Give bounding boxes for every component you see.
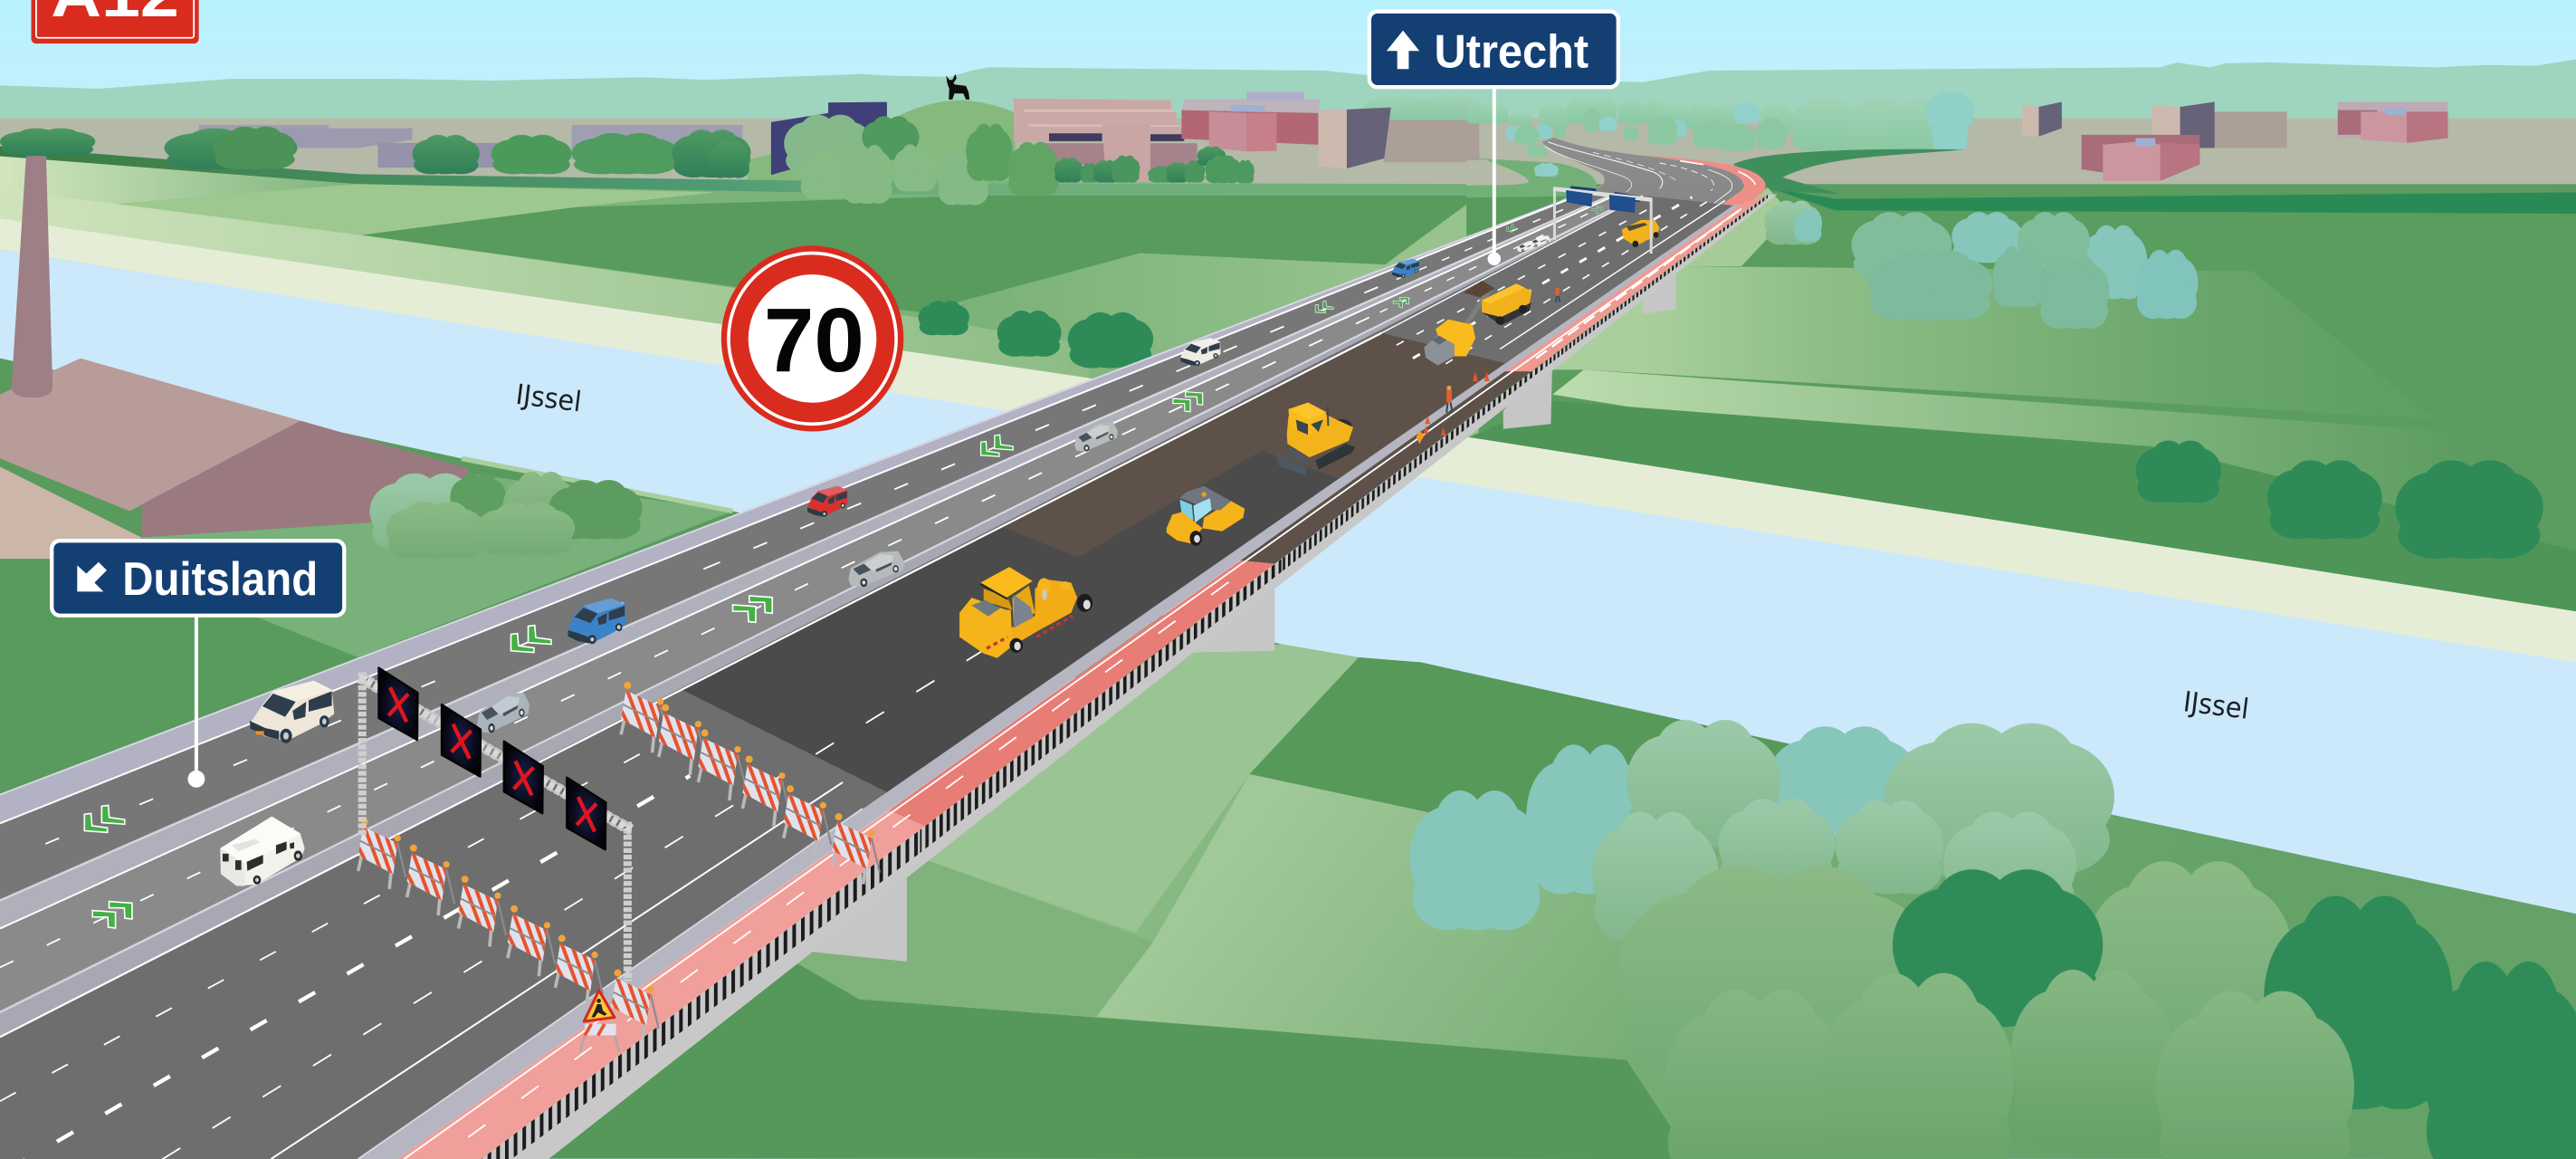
stripped cycle lane bbox=[1240, 371, 1531, 564]
lane closed signal 2 bbox=[442, 704, 481, 777]
distant hills bbox=[0, 59, 2576, 131]
left horizon buildings bbox=[199, 125, 742, 168]
icon: arrow up bbox=[1387, 31, 1419, 69]
white cars farther bbox=[1517, 235, 1550, 252]
workers and cones bbox=[1417, 288, 1560, 444]
large tree cluster foreground bbox=[1409, 720, 2576, 1159]
far road surface bbox=[1466, 138, 1743, 272]
right barrier strip bbox=[358, 204, 1741, 1159]
white van far bbox=[1180, 338, 1221, 366]
far tree line bbox=[1466, 98, 1792, 177]
speed limit sign 70 bbox=[721, 245, 903, 431]
cycle lane upper bbox=[1505, 195, 1768, 371]
closed carriageway bbox=[0, 196, 1733, 1159]
blue car far bbox=[1392, 259, 1419, 278]
barrier by work sign bbox=[606, 970, 659, 1040]
white van bbox=[250, 681, 334, 743]
bridge piers bbox=[794, 263, 1675, 962]
motorway: straight section bbox=[0, 188, 1768, 1159]
cones bbox=[1417, 371, 1490, 444]
bulldozer bbox=[1274, 402, 1355, 475]
icon: arrow down-left bbox=[77, 562, 107, 591]
mid green trees bbox=[1618, 861, 2294, 1081]
dike slope left bbox=[0, 189, 1089, 381]
hill bbox=[748, 101, 1016, 181]
far curved motorway bbox=[1466, 98, 1792, 272]
left horizon trees bbox=[0, 127, 750, 177]
gantry right column bbox=[625, 822, 630, 982]
callout: Utrecht bbox=[1369, 12, 1618, 265]
central horizon trees bbox=[709, 115, 1255, 206]
median strip bbox=[0, 194, 1618, 929]
dark bushes right bbox=[2136, 440, 2543, 559]
right side fields bbox=[1469, 149, 2576, 617]
deer bbox=[946, 74, 969, 100]
callout: Utrecht: Utrecht bbox=[1435, 24, 1589, 77]
fresh asphalt bbox=[682, 450, 1339, 792]
silver car 2 bbox=[848, 551, 904, 587]
red car bbox=[807, 486, 848, 517]
tan built-up ground bbox=[0, 119, 2576, 200]
curb bbox=[1541, 142, 1607, 190]
light field bbox=[115, 184, 716, 235]
left field base bbox=[0, 151, 1479, 493]
river label left: IJssel bbox=[514, 378, 583, 418]
gantry left column bbox=[360, 672, 365, 837]
far dark field bbox=[1466, 196, 1566, 238]
paver machine bbox=[959, 567, 1092, 658]
lower carriageway bbox=[0, 194, 1635, 1011]
pale trees behind buildings bbox=[1363, 95, 1963, 155]
gantry truss bbox=[359, 672, 631, 835]
left barrier strip bbox=[0, 188, 1594, 823]
camper van bbox=[220, 817, 305, 886]
dump truck bbox=[1464, 281, 1531, 325]
worker far bbox=[1556, 288, 1560, 302]
lane closed signal 4 bbox=[567, 778, 606, 849]
upper carriageway bbox=[0, 193, 1610, 899]
dark green trees bbox=[1893, 869, 2576, 1159]
pale green trees upper bbox=[1592, 720, 2114, 942]
second median strip bbox=[0, 196, 1643, 1037]
green horizon band bbox=[0, 147, 1560, 196]
factory bbox=[0, 153, 468, 559]
speed limit sign 70: 70 bbox=[764, 291, 864, 391]
worker bbox=[1446, 386, 1453, 413]
far overhead gantry with blue signs bbox=[1553, 186, 1653, 254]
callout: Duitsland: Duitsland bbox=[122, 552, 318, 605]
trees by factory bbox=[369, 472, 643, 559]
far cycle lane bbox=[1629, 156, 1766, 272]
far lane curves bbox=[1545, 142, 1756, 256]
vehicles in traffic bbox=[220, 235, 1550, 886]
field left of bridge bbox=[0, 359, 986, 986]
lane closed signal 1 bbox=[378, 667, 418, 740]
tall block and brown block bbox=[1318, 108, 1479, 168]
front green trees bbox=[1665, 970, 2354, 1159]
blue SUV bbox=[568, 599, 626, 644]
road roller bbox=[1167, 486, 1245, 546]
teal far trees bbox=[1925, 92, 1975, 151]
far dump truck bbox=[1622, 220, 1660, 247]
right horizon buildings bbox=[2022, 102, 2447, 181]
base land bbox=[0, 184, 2576, 677]
callout: Duitsland bbox=[52, 541, 344, 788]
field patch near factory bbox=[141, 474, 733, 657]
bridge deck side bbox=[482, 194, 1778, 1159]
lane closed signal 3 bbox=[504, 742, 543, 813]
cycle lane lower bbox=[397, 810, 925, 1159]
road number sign A12 bbox=[31, 0, 199, 43]
bushes left of road bbox=[919, 301, 1153, 369]
central horizon: hill, deer, buildings bbox=[748, 74, 1479, 183]
river label right: IJssel bbox=[2181, 685, 2251, 726]
cycle lane middle bbox=[889, 560, 1274, 826]
bridge fence bbox=[482, 195, 1768, 1159]
silver car 1 bbox=[477, 693, 530, 733]
river bank edge bbox=[462, 458, 733, 511]
navy building bbox=[771, 102, 887, 175]
stripped brown surface bbox=[1002, 333, 1505, 557]
chimney bbox=[12, 153, 52, 398]
river IJssel bbox=[0, 250, 2576, 914]
traffic direction chevrons bbox=[84, 206, 1603, 928]
right mid trees bbox=[1764, 200, 2199, 329]
lane markings bbox=[0, 192, 1741, 1159]
far tan lens bbox=[1466, 159, 1529, 186]
red and pink buildings bbox=[1181, 92, 1320, 151]
fields below bridge bbox=[549, 645, 2576, 1159]
river bank pale left and right bbox=[0, 218, 2576, 666]
barrier row front bbox=[353, 819, 603, 1006]
dark field bbox=[361, 196, 1479, 312]
far green verge bbox=[1466, 158, 1597, 235]
pink stepped building bbox=[1014, 99, 1197, 183]
sky bbox=[0, 0, 2576, 131]
silver car 3 bbox=[1074, 423, 1118, 452]
overhead gantry bbox=[359, 667, 631, 982]
teal trees bbox=[1409, 726, 1919, 930]
road works warning sign bbox=[580, 991, 619, 1052]
milling machine bbox=[1424, 288, 1491, 365]
barrier row rear bbox=[616, 682, 880, 885]
